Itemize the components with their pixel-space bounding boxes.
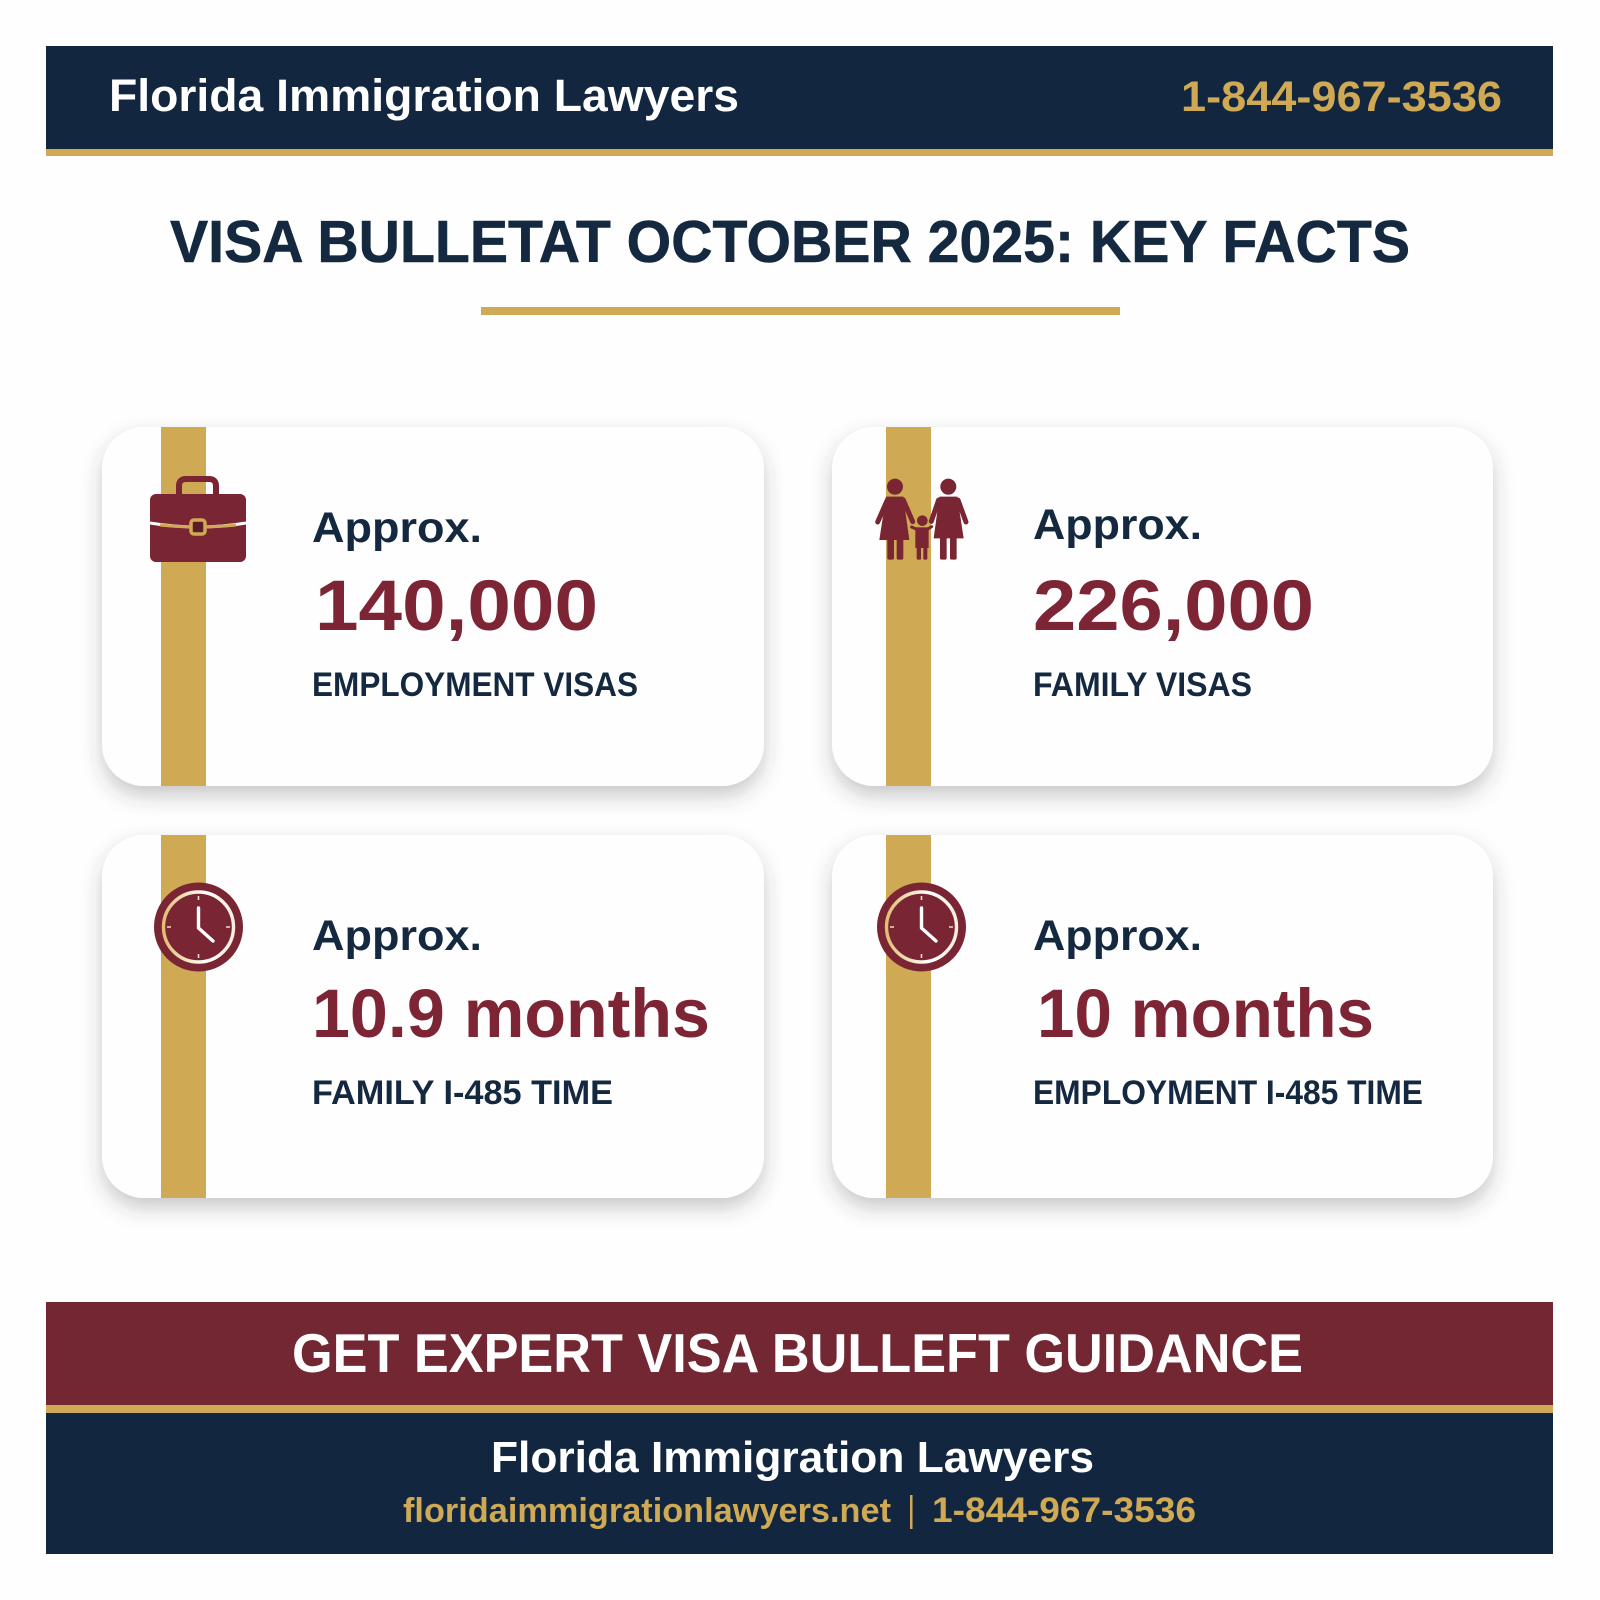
stat: 10.9 months: 10.9 months xyxy=(312,975,710,1052)
gold divider xyxy=(46,1405,1553,1413)
footer separator xyxy=(910,1495,912,1529)
title underline xyxy=(481,307,1120,315)
text: approx: Approx. xyxy=(1033,501,1202,549)
footer phone number: 1-844-967-3536 xyxy=(932,1491,1196,1530)
icon: clock xyxy=(877,882,966,972)
label: employment I-485 time: EMPLOYMENT I-485 TIME xyxy=(1033,1074,1423,1112)
panel: family I-485 time xyxy=(102,835,764,1198)
icon: briefcase xyxy=(150,479,246,562)
call-to-action text: GET EXPERT VISA BULLEFT GUIDANCE xyxy=(292,1322,1303,1384)
panel: family visas xyxy=(832,427,1493,786)
text: approx: Approx. xyxy=(312,504,482,552)
call-to-action banner xyxy=(46,1302,1553,1405)
icon: clock xyxy=(154,882,243,972)
panel: employment visas xyxy=(102,427,764,786)
icon: family xyxy=(878,479,966,560)
text: approx: Approx. xyxy=(312,912,482,960)
header firm name: Florida Immigration Lawyers xyxy=(109,70,739,121)
stat: 140,000: 140,000 xyxy=(315,567,598,646)
stat: 226,000: 226,000 xyxy=(1033,567,1314,646)
label: family visas: FAMILY VISAS xyxy=(1033,666,1252,704)
footer contact panel xyxy=(46,1413,1553,1554)
panel: employment I-485 time xyxy=(832,835,1493,1198)
header bar xyxy=(46,46,1553,156)
text: approx: Approx. xyxy=(1033,912,1202,960)
title: VISA BULLETAT OCTOBER 2025: KEY FACTS xyxy=(170,209,1410,275)
stat: 10 months: 10 months xyxy=(1037,975,1374,1052)
label: employment visas: EMPLOYMENT VISAS xyxy=(312,666,638,704)
header phone number: 1-844-967-3536 xyxy=(1181,73,1502,121)
footer website: floridaimmigrationlawyers.net xyxy=(403,1492,891,1530)
label: family I-485 time: FAMILY I-485 TIME xyxy=(312,1074,613,1112)
footer firm name: Florida Immigration Lawyers xyxy=(491,1433,1094,1482)
